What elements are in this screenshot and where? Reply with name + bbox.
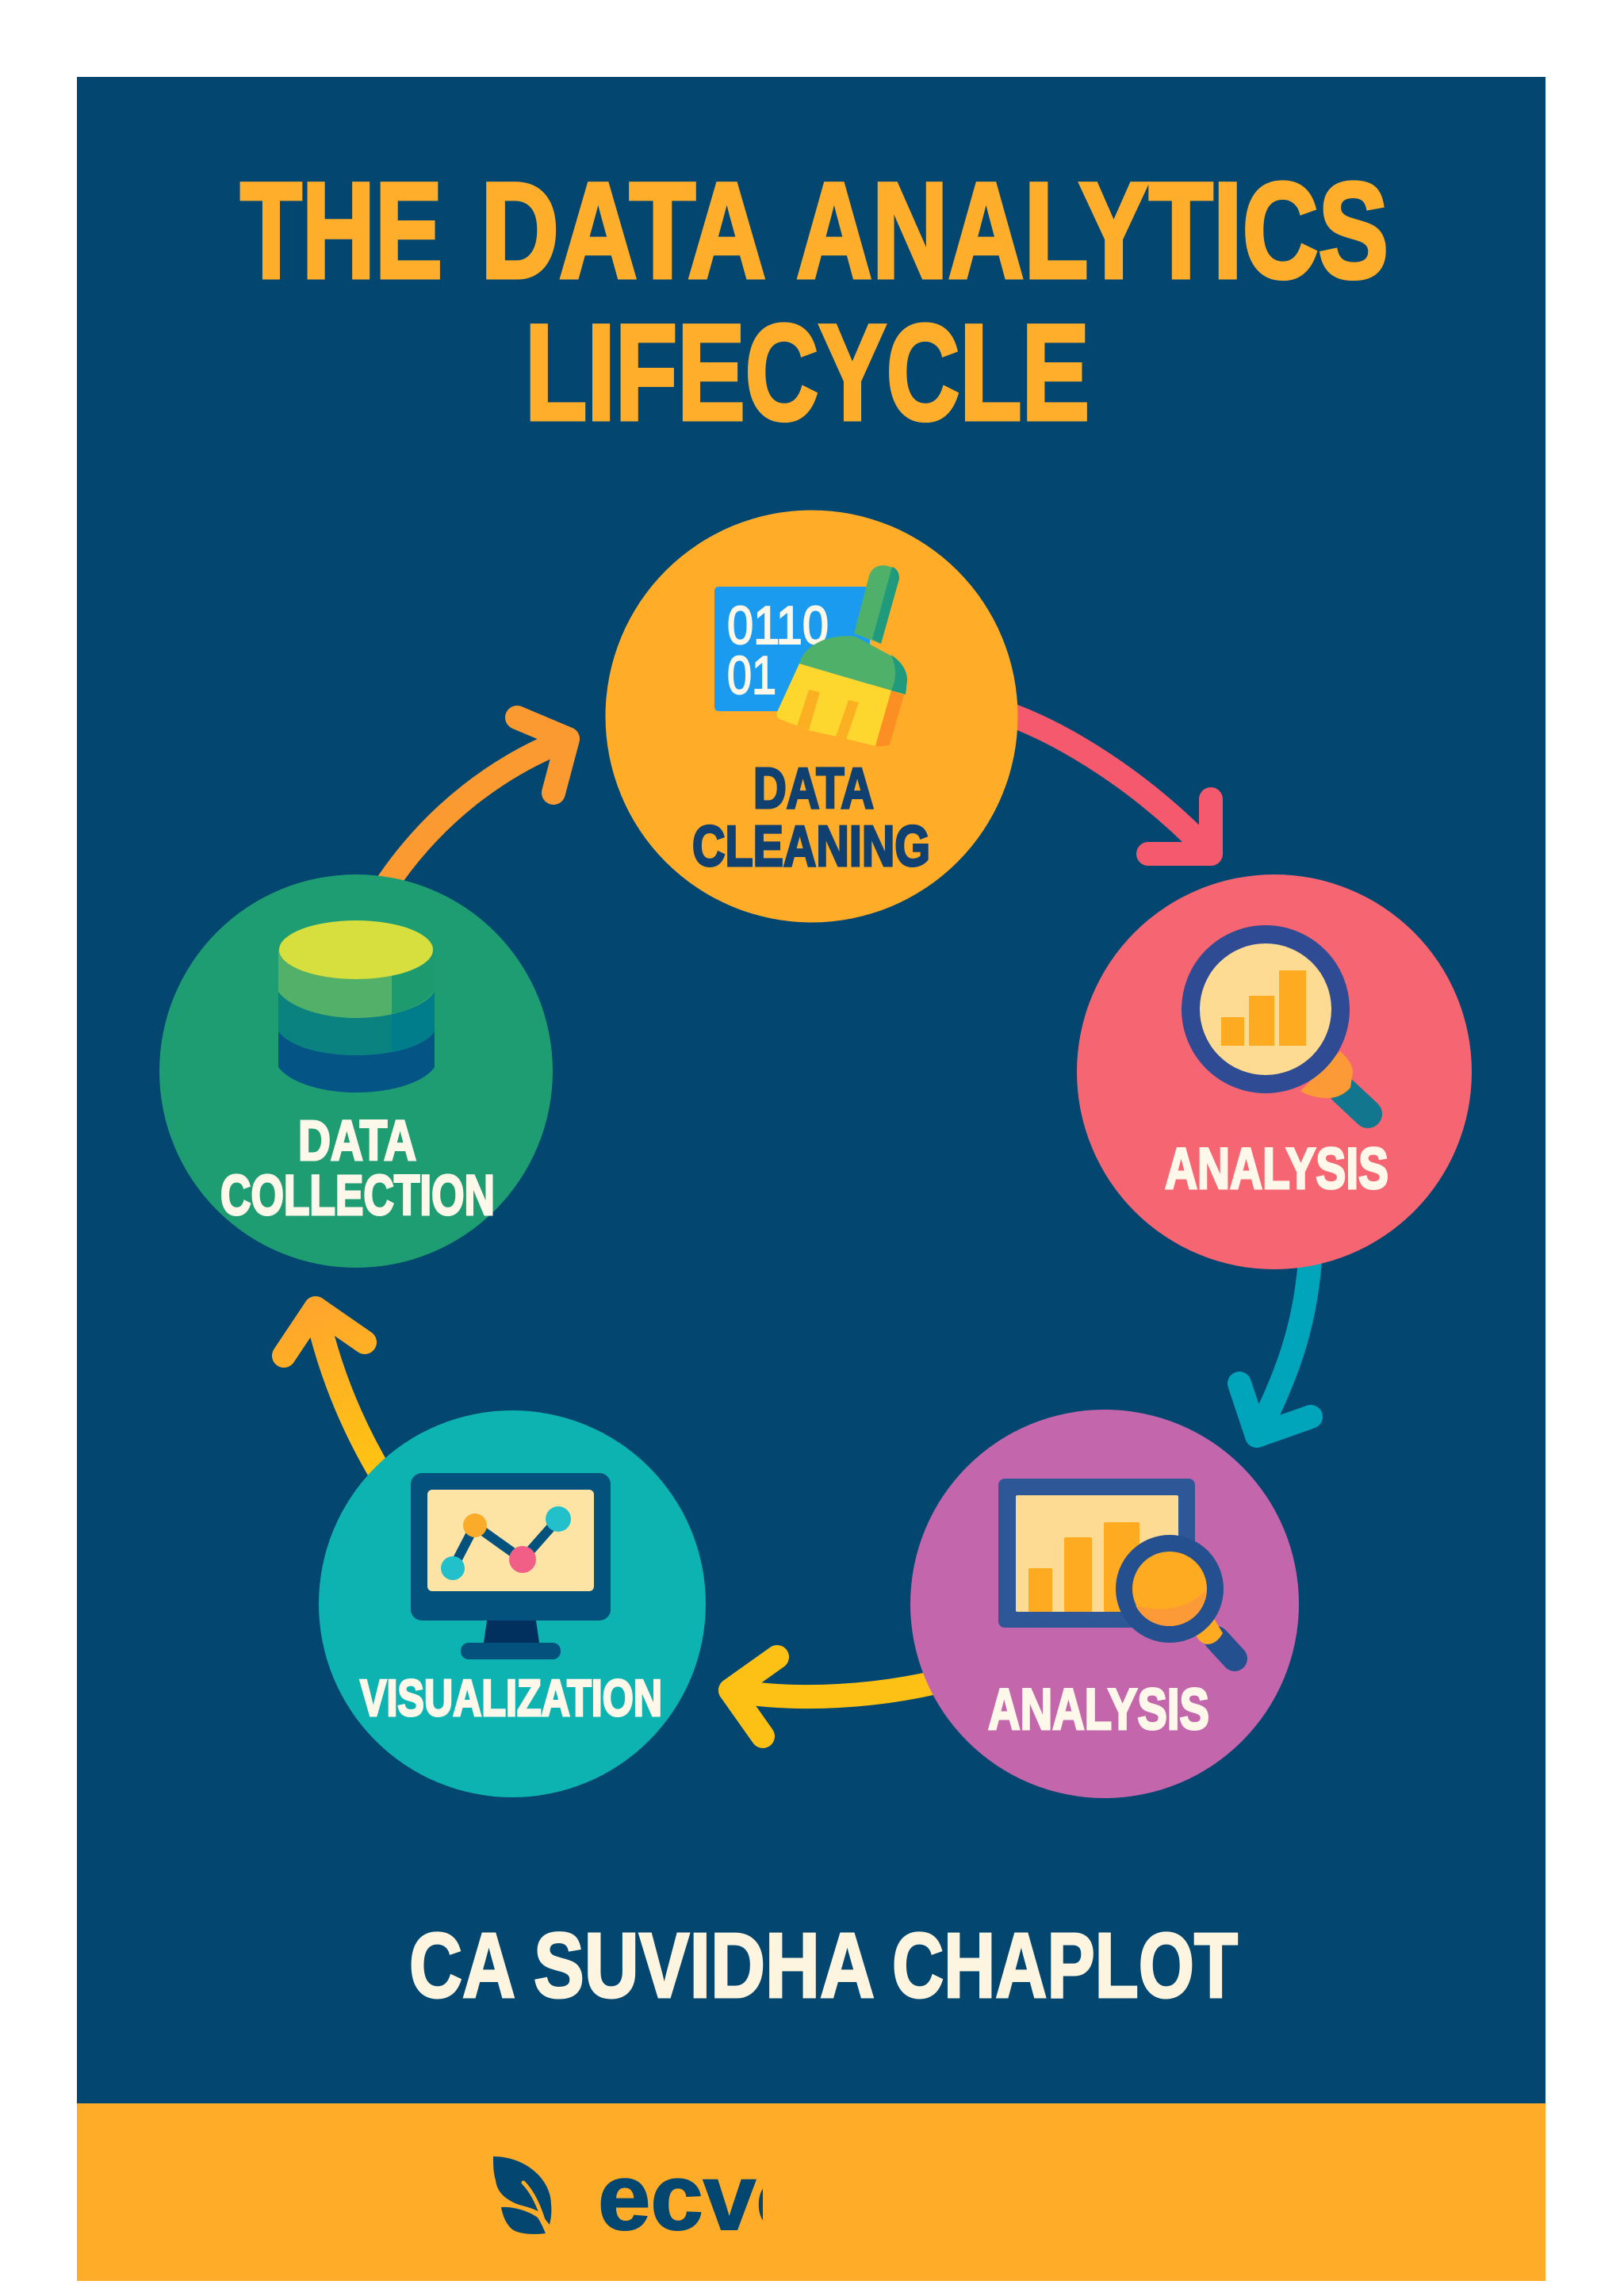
label: ANALYSIS	[988, 1678, 1209, 1742]
node: analysis	[1077, 874, 1472, 1269]
panel: navy background	[77, 77, 1545, 2105]
label: VISUALIZATION	[360, 1669, 662, 1727]
author name: SUVIDHA	[534, 1914, 875, 2017]
label	[692, 757, 930, 878]
node: visualization	[319, 1410, 706, 1797]
label: COLLECTION	[220, 1165, 495, 1227]
arrow: analysis to second analysis	[1239, 1261, 1311, 1436]
node: analysis dashboard	[910, 1410, 1299, 1798]
icon: database	[278, 920, 435, 1093]
label: DATA	[298, 1110, 416, 1173]
author name: CA	[409, 1914, 515, 2017]
icon: magnifier with bars	[1191, 934, 1368, 1114]
icon: monitor chart with magnifier	[998, 1479, 1235, 1659]
title: ANALYTICS	[796, 155, 1388, 307]
icon: broom	[777, 565, 907, 746]
author name	[409, 1914, 1238, 2017]
label	[220, 1110, 495, 1227]
icon: leaf logo	[493, 2156, 551, 2234]
title	[240, 155, 1388, 449]
footer band	[77, 2103, 1545, 2281]
icon: binary card: 01	[727, 645, 776, 706]
icon: monitor with line chart	[411, 1473, 611, 1659]
node: data collection	[159, 874, 553, 1268]
arrow: cleaning to analysis	[1007, 714, 1211, 854]
label: DATA	[753, 757, 874, 821]
logo wordmark: ecvo	[598, 2145, 814, 2250]
author name: CHAPLOT	[892, 1914, 1238, 2017]
arrow: second analysis to visualization	[730, 1657, 936, 1736]
label: ANALYSIS	[1165, 1137, 1388, 1201]
node: data cleaning	[606, 511, 1018, 923]
title: DATA	[481, 155, 766, 307]
title: LIFECYCLE	[525, 297, 1090, 449]
title: THE	[240, 155, 442, 307]
icon: binary card: 0110	[727, 595, 829, 656]
icon: binary card	[714, 587, 870, 711]
arrow: collection to cleaning	[389, 718, 568, 882]
arrow: visualization to collection	[284, 1308, 382, 1476]
label: CLEANING	[692, 815, 930, 878]
